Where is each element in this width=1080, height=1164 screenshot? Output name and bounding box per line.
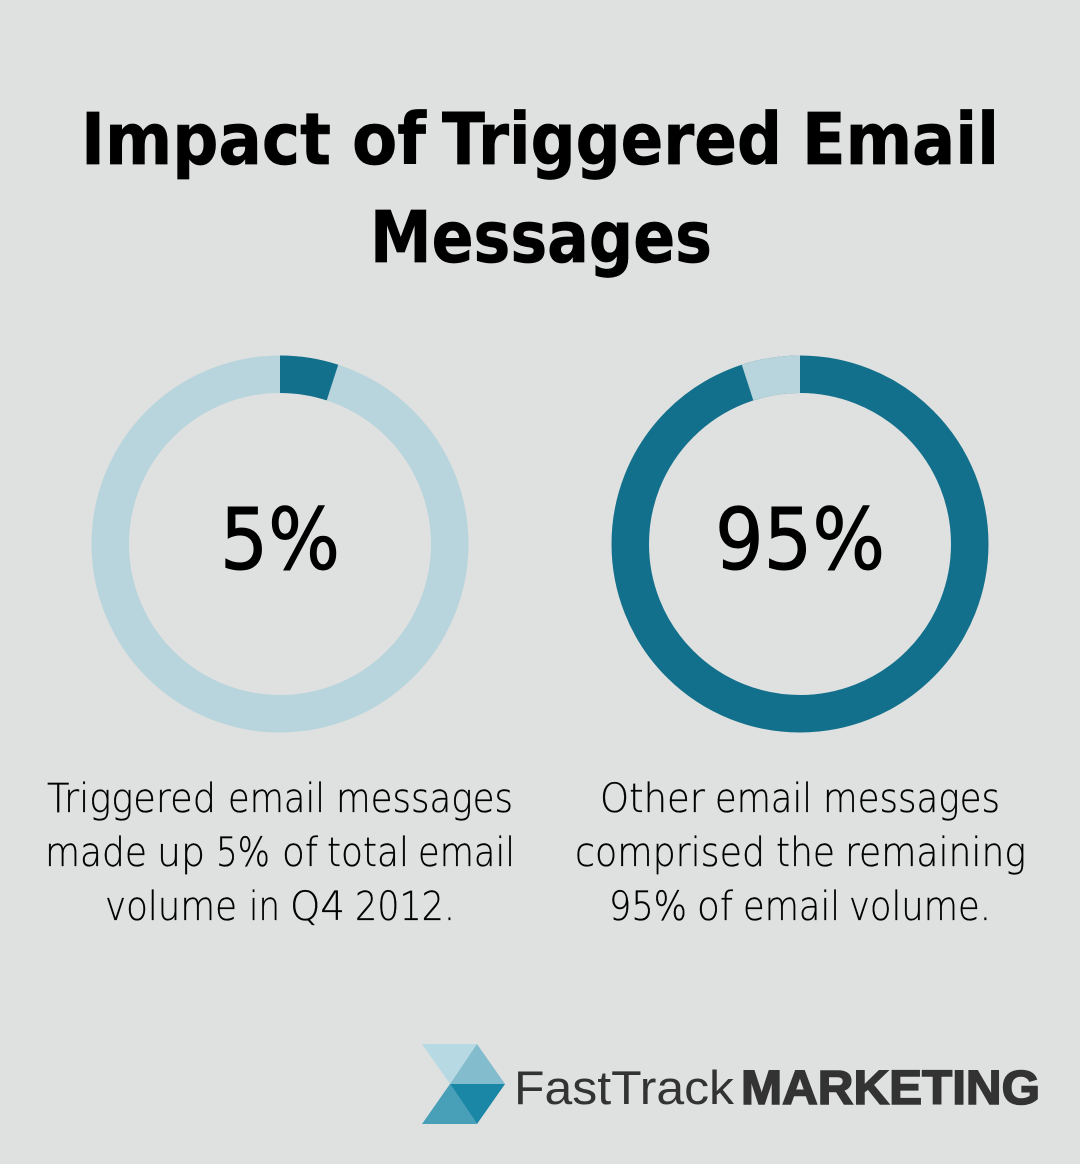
description: triggered email: total: [327, 830, 409, 876]
description: triggered email: Triggered: [47, 776, 216, 822]
description: other email: Other: [600, 776, 706, 822]
panel: triggered email share: [45, 356, 515, 930]
description: other email: messages: [823, 776, 1000, 822]
panel: other email share: [575, 356, 1026, 930]
title: [81, 98, 999, 279]
title: of: [352, 98, 427, 181]
description: triggered email: 5%: [216, 830, 270, 876]
title: Email: [802, 98, 999, 181]
description: triggered email: messages: [336, 776, 513, 822]
logo: FastTrack Marketing: [422, 1044, 1040, 1124]
description: triggered email: email: [228, 776, 325, 822]
wordmark: [514, 1061, 1040, 1115]
description: other email: 95%: [609, 884, 687, 930]
description: triggered email: made: [45, 830, 147, 876]
title: Messages: [370, 196, 712, 279]
description: other email: comprised: [575, 830, 765, 876]
wordmark: FastTrack: [514, 1061, 735, 1114]
description: triggered email: in: [249, 884, 280, 930]
description: triggered email: 2012.: [355, 884, 455, 930]
description: triggered email: up: [157, 830, 205, 876]
icon: logo triangles: [422, 1044, 505, 1124]
description: other email: [575, 776, 1026, 930]
title: Triggered: [442, 98, 782, 181]
description: other email: the: [776, 830, 835, 876]
value: 5%: 5%: [220, 491, 340, 590]
description: other email: volume.: [849, 884, 991, 930]
description: triggered email: of: [282, 830, 318, 876]
donut chart: 5%: [110, 356, 450, 714]
description: triggered email: Q4: [290, 884, 345, 930]
description: triggered email: email: [418, 830, 515, 876]
description: other email: remaining: [845, 830, 1026, 876]
description: other email: email: [715, 776, 812, 822]
wordmark: MARKETING: [741, 1062, 1040, 1115]
title: Impact: [81, 98, 331, 181]
description: triggered email: volume: [105, 884, 237, 930]
description: other email: email: [743, 884, 840, 930]
value: 95%: 95%: [715, 491, 885, 590]
donut chart: 95%: [630, 356, 970, 714]
description: other email: of: [697, 884, 733, 930]
description: triggered email: [45, 776, 515, 930]
